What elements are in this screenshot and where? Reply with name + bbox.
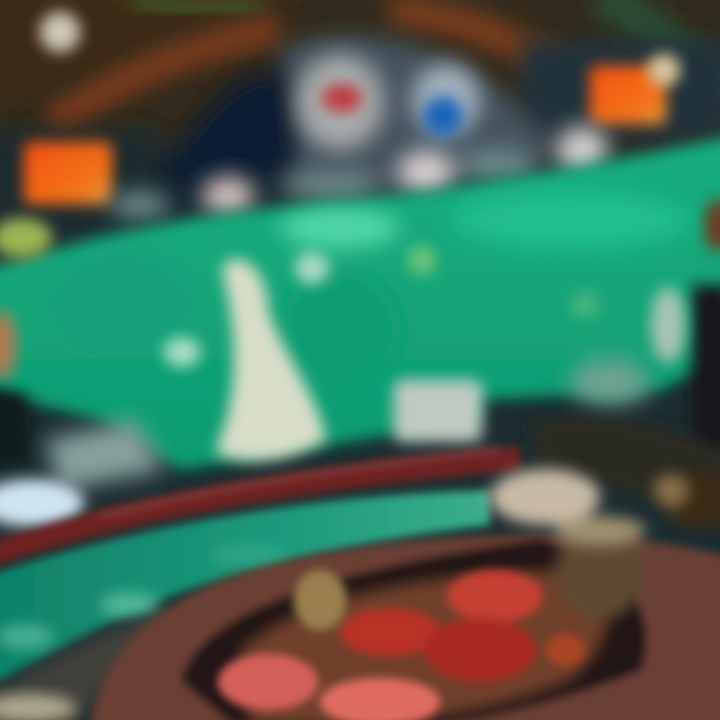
brown bowl inner	[240, 570, 606, 720]
lime sign left	[0, 218, 52, 258]
dark figure	[160, 70, 294, 195]
light patches on felt	[0, 547, 290, 649]
grey area behind table	[45, 420, 165, 490]
pale blobs above green wall	[110, 126, 608, 219]
light green highlights	[50, 190, 690, 390]
orange sign left	[24, 142, 112, 204]
white map landmass	[164, 245, 600, 461]
white glow left	[0, 479, 84, 527]
green felt table	[0, 490, 490, 690]
table rail	[0, 458, 520, 558]
stacked beige chips right	[490, 469, 720, 620]
background: top wall and arches	[0, 0, 720, 230]
white and red round figure	[296, 54, 384, 150]
grey crowd band	[280, 36, 560, 195]
right figure	[570, 199, 720, 455]
roulette wheel	[90, 535, 720, 720]
ceiling light	[40, 12, 80, 52]
dark back right	[530, 416, 720, 520]
pale map block	[394, 380, 482, 442]
white and blue round figure	[412, 64, 480, 136]
orange sign right	[590, 66, 666, 124]
left figure	[0, 311, 30, 465]
felt lower-left edge	[0, 610, 170, 720]
green map wall	[0, 135, 720, 470]
chips and bowl contents	[218, 570, 585, 720]
